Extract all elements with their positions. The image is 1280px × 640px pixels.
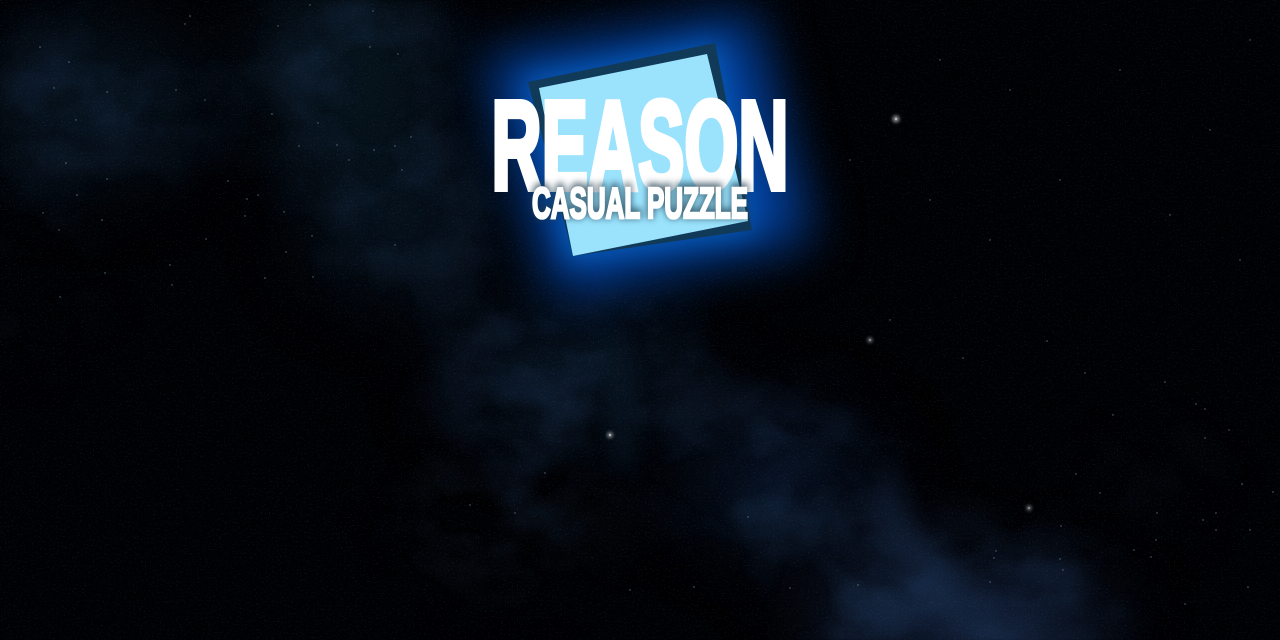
bright star: middle right xyxy=(867,337,873,343)
bright star: centre xyxy=(607,432,613,438)
light blue tilted square xyxy=(539,54,748,256)
title: REASON: REASON xyxy=(492,75,788,216)
logo xyxy=(482,12,812,296)
subtitle shadow: CASUAL PUZZLE xyxy=(532,177,748,226)
subtitle: CASUAL PUZZLE: CASUAL PUZZLE xyxy=(532,180,748,228)
dark back square xyxy=(528,43,752,256)
blue glow xyxy=(482,12,812,296)
bright star: lower right xyxy=(1026,505,1032,511)
inner blue glow xyxy=(524,40,756,262)
bright star: upper right xyxy=(892,115,900,123)
